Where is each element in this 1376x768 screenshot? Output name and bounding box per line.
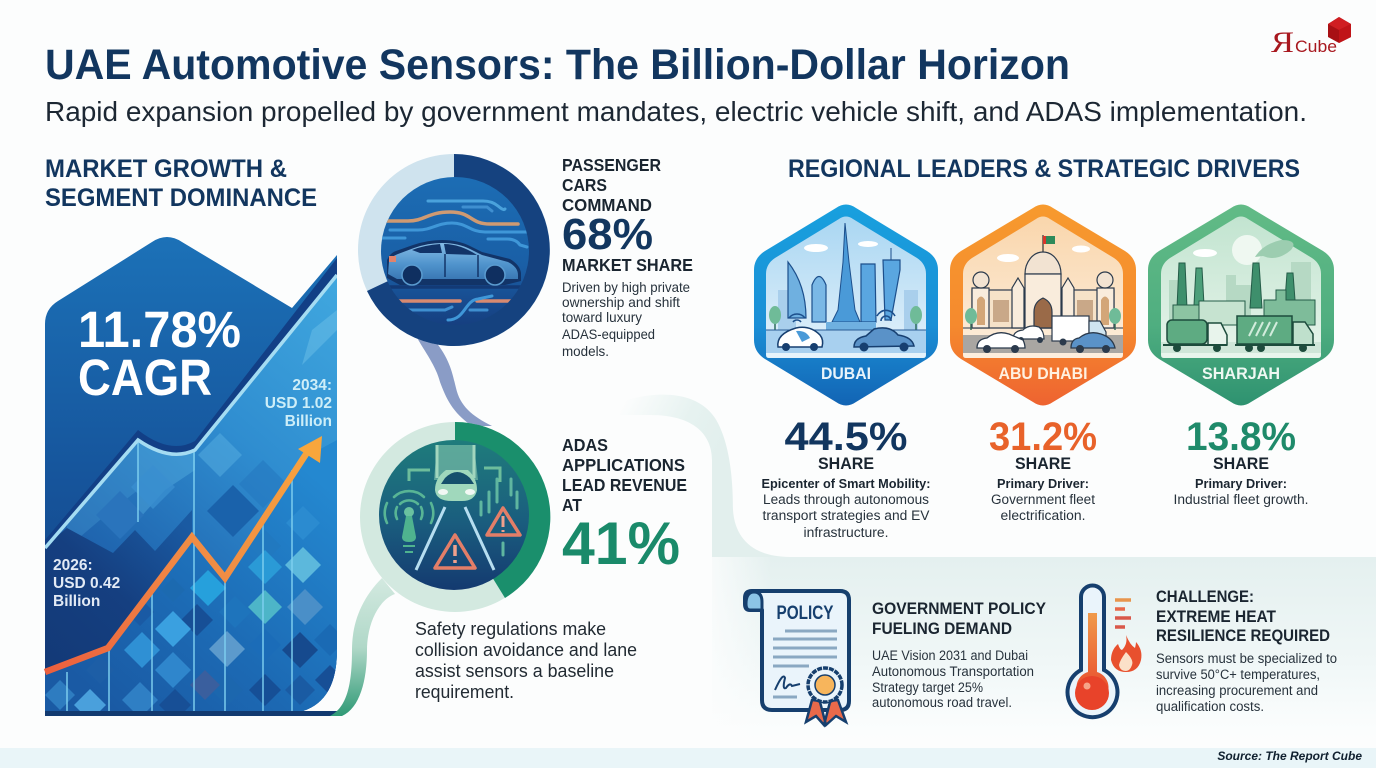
stat: CAGR: 11.78% [78, 301, 241, 358]
panel: CAGR growth chart [45, 230, 346, 721]
text: passenger cars: 68% [562, 210, 653, 259]
text: government policy: FUELING DEMAND [872, 619, 1012, 638]
heading: market growth [45, 155, 317, 212]
text: ADAS applications: LEAD REVENUE [562, 475, 687, 495]
logo: RCube [1271, 17, 1351, 59]
icon: Dubai skyline [766, 223, 926, 357]
label: 2026 value [53, 557, 120, 610]
text: heat challenge [1156, 587, 1337, 714]
stat: Dubai share: Epicenter of Smart Mobility: [762, 476, 930, 491]
icon: car with road and warnings [385, 445, 520, 570]
text: heat challenge: CHALLENGE: [1156, 587, 1254, 606]
text: passenger cars [562, 155, 693, 359]
text: safety regulations: Safety regulations make [415, 619, 606, 639]
stat: Abu Dhabi share: electrification. [1000, 508, 1086, 523]
connector: circle one to circle two [416, 336, 492, 426]
stat: Sharjah share: 13.8% [1186, 415, 1296, 459]
label: 2034 value: Billion [285, 413, 332, 430]
label: 2026 value: Billion [53, 593, 100, 610]
icon: car with sensor lines [380, 201, 530, 320]
stat: CAGR: CAGR [78, 349, 212, 406]
badge: Abu Dhabi: ABU DHABI [998, 364, 1088, 383]
stat: Dubai share [762, 415, 930, 540]
stat: Abu Dhabi share: SHARE [1015, 454, 1071, 473]
text: government policy [872, 599, 1047, 710]
text: ADAS applications: AT [562, 495, 582, 515]
stat: Abu Dhabi share [989, 415, 1097, 523]
stat: Sharjah share: SHARE [1213, 454, 1269, 473]
stat: Sharjah share: Industrial fleet growth. [1174, 492, 1308, 507]
dark wedge above orange line [45, 510, 192, 672]
stat: Abu Dhabi share: 31.2% [989, 415, 1097, 459]
stat: Dubai share: Leads through autonomous [763, 492, 929, 507]
text: safety regulations [415, 619, 637, 702]
stat: Abu Dhabi share: Primary Driver: [997, 476, 1089, 491]
text: passenger cars: toward luxury [562, 309, 642, 325]
text: passenger cars: models. [562, 343, 609, 359]
text: government policy: Strategy target 25% [872, 680, 983, 695]
text: ADAS applications [562, 435, 687, 577]
badge: Sharjah: SHARJAH [1202, 364, 1280, 383]
icon: Abu Dhabi palace [963, 235, 1123, 357]
badge: Dubai: DUBAI [821, 364, 871, 383]
label: 2026 value: 2026: [53, 557, 93, 574]
stat: CAGR [78, 301, 241, 406]
stat: Dubai share: 44.5% [784, 415, 908, 459]
stat: Dubai share: transport strategies and EV [762, 508, 930, 523]
label: 2034 value: 2034: [292, 377, 332, 394]
heading: market growth: MARKET GROWTH & [45, 155, 287, 183]
text: passenger cars: Driven by high private [562, 279, 690, 295]
text: safety regulations: assist sensors a baseline [415, 661, 614, 681]
subtitle: Rapid expansion propelled by government mandates, electric vehicle shift, and ADAS implementation. [45, 96, 1307, 127]
donut: passenger cars 68% [358, 154, 550, 346]
text: government policy: autonomous road travel. [872, 695, 1012, 710]
icon: Sharjah industry [1161, 235, 1321, 357]
text: heat challenge: Sensors must be specialized to [1156, 651, 1337, 666]
heading: market growth: SEGMENT DOMINANCE [45, 184, 317, 212]
text: heat challenge: increasing procurement and [1156, 683, 1318, 698]
text: ADAS applications: ADAS [562, 435, 608, 455]
footer band [0, 748, 1376, 768]
connector: circle two to baseline [330, 578, 395, 716]
text: safety regulations: requirement. [415, 682, 514, 702]
icon: policy document [745, 591, 849, 725]
text: government policy: UAE Vision 2031 and Dubai [872, 648, 1028, 663]
badge: Abu Dhabi [950, 204, 1136, 406]
stat: Abu Dhabi share: Government fleet [991, 492, 1095, 507]
heading: regional leaders: REGIONAL LEADERS & STRATEGIC DRIVERS [788, 155, 1300, 183]
badge: Dubai [754, 204, 938, 406]
stat: Sharjah share [1174, 415, 1308, 507]
text: passenger cars: PASSENGER [562, 155, 661, 175]
text: passenger cars: MARKET SHARE [562, 255, 693, 275]
text: safety regulations: collision avoidance and lane [415, 640, 637, 660]
text: heat challenge: RESILIENCE REQUIRED [1156, 626, 1330, 645]
logo: RCube: Cube [1295, 38, 1337, 56]
title: UAE Automotive Sensors: The Billion-Dollar Horizon [45, 41, 1070, 89]
background curve and lower right panel [620, 395, 1376, 748]
text: ADAS applications: APPLICATIONS [562, 455, 685, 475]
text: passenger cars: COMMAND [562, 195, 652, 215]
text: passenger cars: CARS [562, 175, 607, 195]
stat: Dubai share: infrastructure. [804, 525, 888, 540]
icon: thermometer with flame [1068, 586, 1141, 717]
stat: Sharjah share: Primary Driver: [1195, 476, 1287, 491]
area under orange line [45, 440, 337, 716]
arrow: orange growth trend [45, 436, 322, 672]
text: heat challenge: EXTREME HEAT [1156, 607, 1277, 626]
text: passenger cars: ADAS-equipped [562, 326, 655, 342]
stat: Dubai share: SHARE [818, 454, 874, 473]
icon: policy document: POLICY [776, 603, 834, 624]
text: government policy: GOVERNMENT POLICY [872, 599, 1047, 618]
text: ADAS applications: 41% [562, 510, 680, 577]
label: 2026 value: USD 0.42 [53, 575, 120, 592]
label: 2034 value: USD 1.02 [265, 395, 332, 412]
source note: Source: The Report Cube [1217, 749, 1362, 763]
label: 2034 value [265, 377, 332, 430]
logo: RCube: Я [1271, 26, 1294, 59]
text: government policy: Autonomous Transportation [872, 664, 1034, 679]
badge: Sharjah [1148, 204, 1334, 406]
text: heat challenge: survive 50°C+ temperatures, [1156, 667, 1320, 682]
text: passenger cars: ownership and shift [562, 294, 680, 310]
text: heat challenge: qualification costs. [1156, 699, 1264, 714]
donut: ADAS 41% [360, 422, 550, 612]
